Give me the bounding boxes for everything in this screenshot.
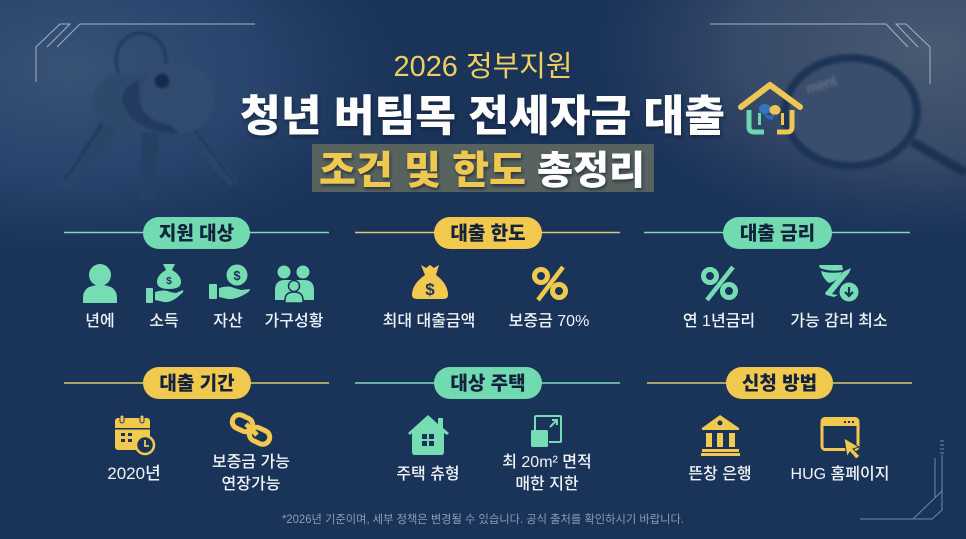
heading: 대출 금리 <box>644 217 910 249</box>
heading: 대상 주택: 대상 주택 <box>450 372 526 394</box>
icon: calendar with clock <box>115 415 154 454</box>
icon: chain link <box>230 412 272 447</box>
heading: 대출 기간 <box>64 367 329 399</box>
panel: 대출 기간 <box>64 367 329 493</box>
label: 최 20m² 면적 매한 지한 <box>502 453 592 493</box>
panel: 대출 한도 <box>355 217 620 330</box>
label: 보증금 가능 연장가능 <box>212 453 290 493</box>
label: 최대 대출금액: 최대 대출금액 <box>383 312 475 330</box>
corner decoration: top left <box>36 24 255 82</box>
label: 소득: 소득 <box>149 313 179 330</box>
heading: 대출 금리: 대출 금리 <box>740 222 815 244</box>
corner decoration: bottom right <box>860 441 944 519</box>
heading: 대출 한도: 대출 한도 <box>450 222 526 244</box>
title: main line: 청년 버팀목 전세자금 대출 <box>240 93 725 141</box>
label: 뜬창 은행: 뜬창 은행 <box>688 465 752 483</box>
label: 최 20m² 면적 매한 지한: 최 20m² 면적 <box>502 453 592 471</box>
title: highlighted subtitle: 조건 및 한도 <box>319 150 526 193</box>
icon: money bag in hand: $ <box>166 276 172 287</box>
heading: 신청 방법 <box>647 367 912 399</box>
icon: coin in hand: $ <box>233 268 241 283</box>
icon: bank <box>701 415 740 456</box>
label: 자산: 자산 <box>213 312 243 330</box>
label: 보증금 70%: 보증금 70% <box>509 313 589 330</box>
panel: 지원 대상 <box>64 217 329 330</box>
title: highlighted subtitle: 총정리 <box>537 150 645 193</box>
icon: money bag: $ <box>425 280 435 299</box>
heading: 대출 한도 <box>355 217 620 249</box>
label: 연 1년금리: 연 1년금리 <box>683 312 755 330</box>
icon: rate decrease <box>819 265 858 302</box>
label: 가구성황: 가구성황 <box>265 312 324 330</box>
icon: percent <box>704 267 736 300</box>
label: 2020년: 2020년 <box>107 464 161 483</box>
panel: 대상 주택 <box>355 367 620 493</box>
heading: 신청 방법: 신청 방법 <box>742 372 817 394</box>
panel: 대출 금리 <box>644 217 910 330</box>
heading: 대출 기간: 대출 기간 <box>159 372 235 394</box>
footnote: *2026년 기준이며, 세부 정책은 변경될 수 있습니다. 공식 출처를 확인하시기 바랍니다. <box>282 512 684 526</box>
icon: money bag in hand <box>146 264 183 303</box>
icon: money bag <box>412 265 448 299</box>
panel: 신청 방법 <box>647 367 912 483</box>
label: 최 20m² 면적 매한 지한: 매한 지한 <box>515 475 579 493</box>
label: 년에: 년에 <box>85 312 115 330</box>
icon: area expand <box>531 416 561 447</box>
icon: house logo <box>741 85 800 132</box>
label: 가능 감리 최소: 가능 감리 최소 <box>790 312 888 330</box>
heading: 대상 주택 <box>355 367 620 399</box>
corner decoration: top right <box>710 24 930 84</box>
label: 보증금 가능 연장가능: 보증금 가능 <box>212 453 290 471</box>
background photo: magnifying glass: ment <box>804 72 839 97</box>
heading: 지원 대상: 지원 대상 <box>159 222 235 244</box>
icon: browser with cursor <box>822 418 860 459</box>
label: HUG 홈페이지: HUG 홈페이지 <box>791 465 889 483</box>
label: 보증금 가능 연장가능: 연장가능 <box>222 475 280 493</box>
heading: 지원 대상 <box>64 217 329 249</box>
icon: house <box>408 415 449 455</box>
icon: person <box>83 264 117 303</box>
background photo: keys <box>60 33 238 200</box>
title: year line: 2026 정부지원 <box>394 51 572 83</box>
icon: percent <box>534 267 566 300</box>
icon: family <box>275 266 314 303</box>
title: highlighted subtitle <box>312 144 654 193</box>
label: 주택 츄형: 주택 츄형 <box>396 465 460 483</box>
icon: coin in hand <box>209 264 250 299</box>
background photo: magnifying glass <box>785 58 966 173</box>
